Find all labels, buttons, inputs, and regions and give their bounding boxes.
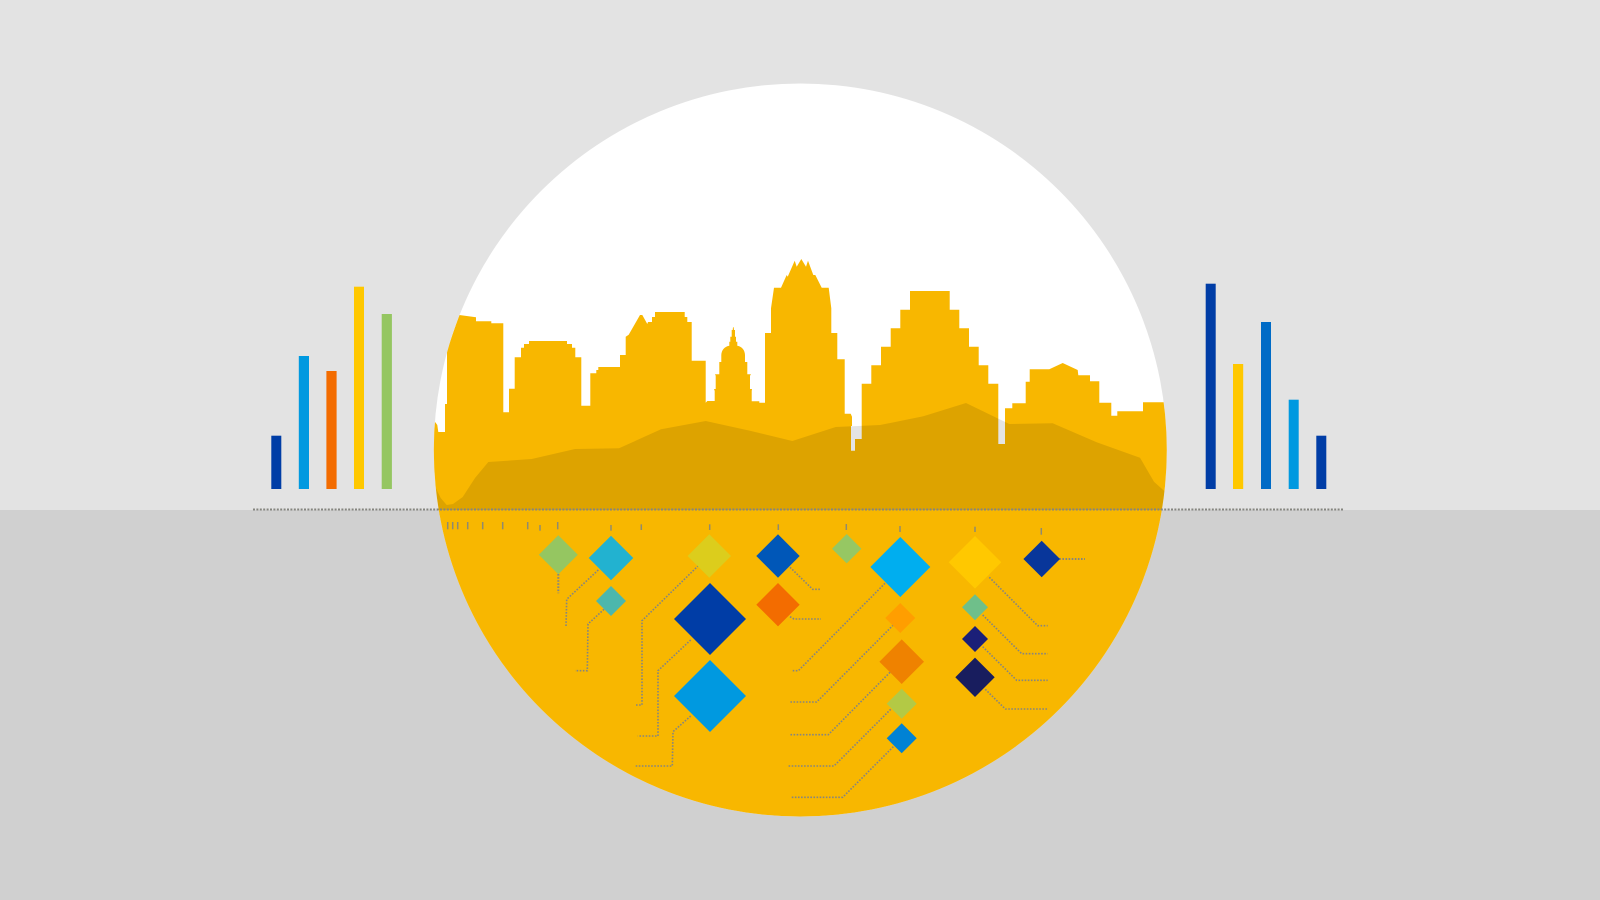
- lower yellow half of the circle: [430, 509, 1170, 819]
- white sky circle: [434, 84, 1167, 816]
- background: upper band: [0, 0, 1600, 510]
- diamonds: [539, 534, 1060, 753]
- dotted leader lines: [558, 559, 1085, 797]
- left bar chart: [271, 287, 392, 489]
- hills overlay: [425, 403, 1175, 510]
- dotted horizon line: [253, 508, 1344, 510]
- tick marks along the horizon: [448, 522, 1041, 535]
- background: lower band: [0, 510, 1600, 900]
- circular yellow scene: [425, 259, 1175, 819]
- right bar chart: [1206, 284, 1326, 489]
- city skyline silhouette: [425, 259, 1175, 510]
